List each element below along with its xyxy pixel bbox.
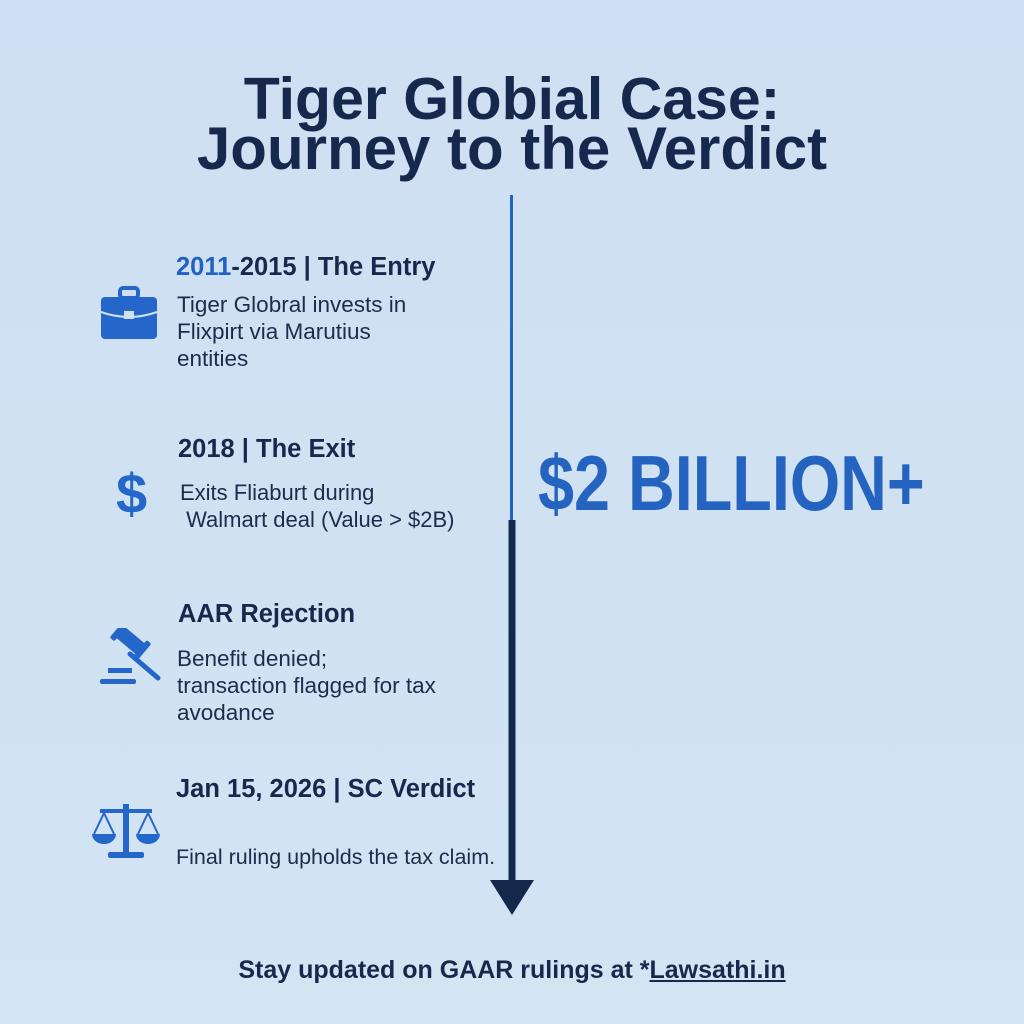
event: SC verdict: Final ruling upholds the tax claim. — [176, 845, 495, 869]
icon: briefcase — [101, 286, 157, 339]
event: AAR: avodance — [177, 700, 275, 725]
icon: dollar: $ — [116, 462, 147, 525]
footer: Stay updated on GAAR rulings at *Lawsathi.in — [238, 956, 786, 984]
event: SC verdict — [92, 775, 495, 869]
title — [197, 66, 827, 182]
event: entry: 2011-2015 | The Entry — [176, 253, 435, 281]
big stat: $2 BILLION+ — [538, 439, 925, 527]
title: Journey to the Verdict — [197, 115, 827, 182]
event: exit: Walmart deal (Value > $2B) — [186, 507, 455, 532]
event: AAR: Benefit denied; — [177, 646, 327, 671]
event: SC verdict: Jan 15, 2026 | SC Verdict — [176, 775, 475, 803]
event: entry: Tiger Globral invests in — [177, 292, 406, 317]
event: exit — [116, 435, 455, 532]
event: exit: 2018 | The Exit — [178, 435, 355, 463]
icon: scales — [92, 804, 160, 858]
timeline arrow — [490, 195, 534, 915]
event: AAR: AAR Rejection — [178, 600, 355, 628]
event: exit: Exits Fliaburt during — [180, 480, 374, 505]
icon: gavel — [100, 628, 160, 684]
event: AAR — [100, 600, 436, 725]
title: Tiger Globial Case: — [244, 66, 780, 132]
event: entry: Flixpirt via Marutius — [177, 319, 371, 344]
event: entry: entities — [177, 346, 248, 371]
event: AAR: transaction flagged for tax — [177, 673, 436, 698]
event: entry — [101, 253, 436, 371]
